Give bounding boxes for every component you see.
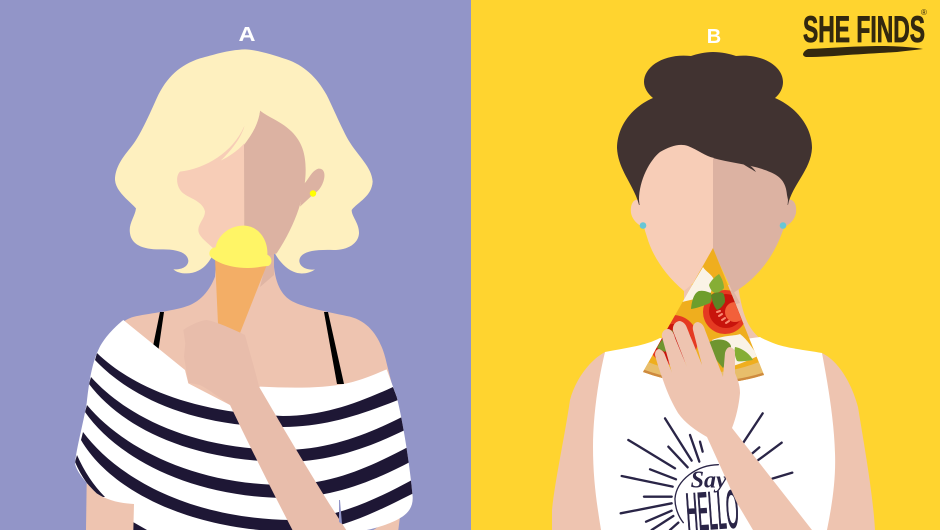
- panel: right background B: [471, 0, 940, 530]
- figure B: woman with pizza: [552, 52, 875, 530]
- pizza slice: [643, 248, 764, 384]
- crust edge: [643, 372, 764, 384]
- t-shirt graphic: sun and text: [621, 413, 792, 530]
- logo registered mark: ®: [921, 8, 927, 17]
- pizza base: [643, 248, 764, 384]
- body skin A: [93, 253, 393, 423]
- label B: B: [707, 26, 721, 48]
- arm and hand B: [655, 321, 812, 530]
- strap left: [152, 312, 164, 353]
- basil top leaves: [691, 291, 711, 309]
- face lit side A: [177, 126, 244, 260]
- neck and shoulders B: [660, 285, 762, 345]
- panel: left background A: [0, 0, 471, 530]
- logo brush stroke: [803, 46, 923, 57]
- face shadow side A: [244, 111, 306, 263]
- earrings B: [640, 222, 786, 229]
- white tank top B: [593, 337, 835, 530]
- sun rays: [621, 413, 792, 530]
- logo: SHE FINDS: [803, 8, 927, 57]
- face lit side B: [639, 145, 714, 291]
- hair lock A: [221, 111, 260, 161]
- arm and hand A: [183, 320, 347, 530]
- face shadow side B: [713, 158, 788, 293]
- mozzarella: [682, 267, 714, 302]
- hair B with bun: [617, 52, 812, 205]
- right lower arm A: [373, 517, 400, 530]
- basil left: [657, 330, 674, 352]
- left lower arm A: [86, 483, 134, 530]
- earring A: [310, 190, 316, 197]
- ice cream scoop: [209, 226, 271, 268]
- text: Say: Say: [691, 467, 727, 493]
- ice cream cone: [215, 258, 268, 333]
- hair A: [115, 49, 373, 273]
- neck shadow A: [260, 250, 274, 287]
- hair strand B: [739, 161, 756, 172]
- left arm B: [552, 352, 605, 530]
- right arm B: [822, 353, 875, 530]
- tomato large: [703, 290, 747, 334]
- neck shadow B: [722, 290, 740, 306]
- figure A: woman with ice cream: [70, 49, 420, 530]
- tomato seeds: [717, 311, 729, 323]
- ears B: [631, 200, 796, 228]
- crust inner: [644, 362, 763, 379]
- basil small right: [735, 347, 753, 361]
- basil lower: [708, 340, 731, 368]
- striped top A: [70, 310, 420, 530]
- label A: A: [238, 24, 256, 46]
- sun circle: [675, 465, 718, 523]
- small tick on arm: [339, 500, 342, 524]
- tomato left: [648, 315, 698, 365]
- strap right: [324, 312, 344, 384]
- ear A: [300, 169, 324, 207]
